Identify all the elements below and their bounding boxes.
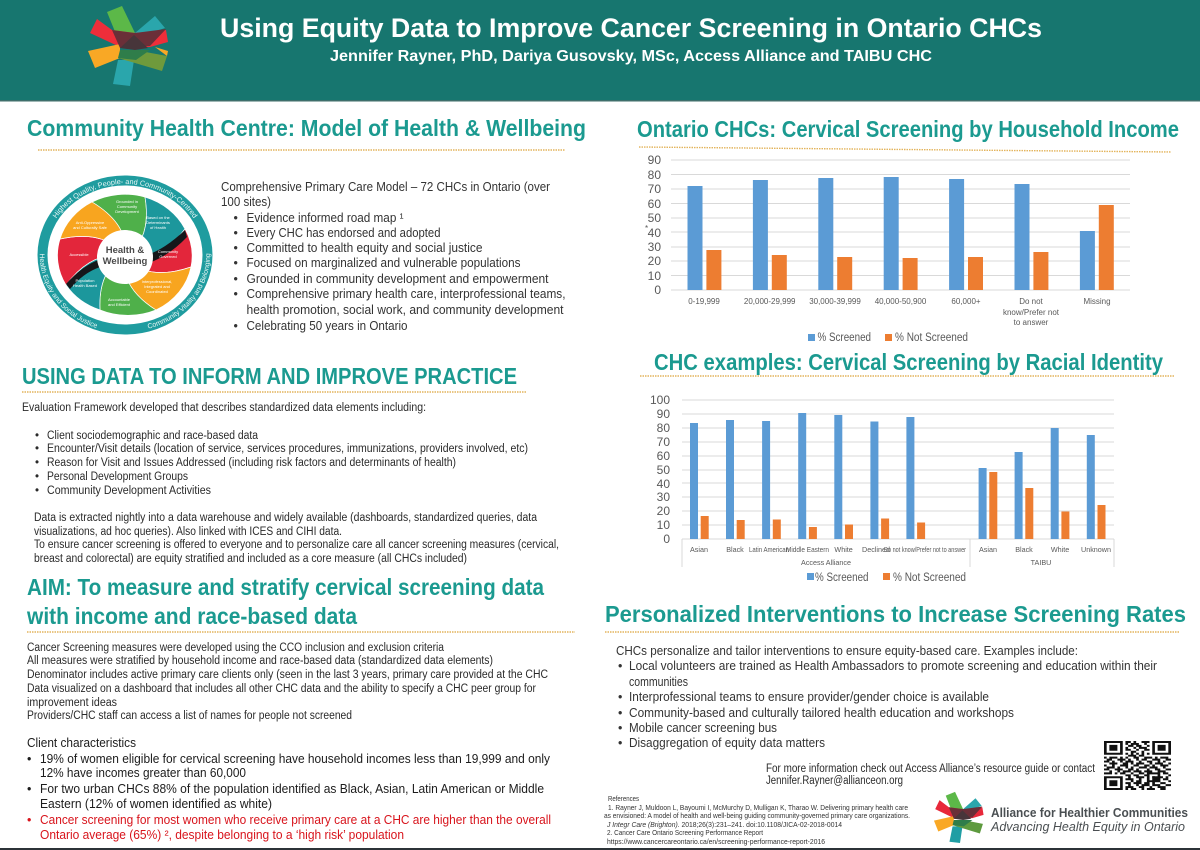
text: comprehensive primary care model: Comprehensive primary health care, interprofessional teams, <box>246 287 566 301</box>
bar chart: screening by income: 40 <box>648 226 661 240</box>
text: evaluation framework: Encounter/Visit details (location of service, services procedures, immunizations, providers involved, etc) <box>47 443 528 455</box>
bar chart: screening by racial identity: Asian <box>690 545 708 554</box>
text: client characteristics: 19% of women eligible for cervical screening have household incomes less than 19,999 and only <box>40 752 551 766</box>
text: references: 1. Rayner J, Muldoon L, Bayoumi I, McMurchy D, Mulligan K, Tharao W. Delivering primary health care <box>608 803 908 812</box>
text: references: as envisioned: A model of health and well-being guiding community-governed primary care organizations. <box>604 811 910 820</box>
text: client characteristics: Client characteristics <box>27 736 136 750</box>
title: Using Equity Data to Improve Cancer Screening in Ontario CHCs <box>220 13 1042 43</box>
diagram: health and wellbeing wheel: Accessible <box>69 252 89 257</box>
legend: income chart: % Screened <box>818 332 871 344</box>
header banner <box>0 0 1200 102</box>
authors: Jennifer Rayner, PhD, Dariya Gusovsky, MSc, Access Alliance and TAIBU CHC <box>330 48 932 65</box>
text: interventions list <box>616 644 1157 750</box>
diagram: health and wellbeing wheel: Health Based <box>73 283 97 288</box>
bar chart: screening by racial identity: Middle Eastern <box>786 545 829 554</box>
diagram: health and wellbeing wheel: Health & <box>106 245 144 256</box>
text: comprehensive primary care model: • <box>234 226 238 240</box>
text: Alliance name and tagline: Alliance for Healthier Communities <box>991 806 1188 820</box>
heading: personalized interventions: Personalized Interventions to Increase Screening Rates <box>605 601 1186 627</box>
text: evaluation framework: • <box>35 471 39 483</box>
bar chart: screening by racial identity: Black <box>726 545 744 554</box>
text: comprehensive primary care model: Every CHC has endorsed and adopted <box>246 226 441 240</box>
text: interventions list: CHCs personalize and tailor interventions to ensure equity-based care. Examples include: <box>616 644 1078 658</box>
bar chart: screening by racial identity <box>650 393 1114 584</box>
diagram: health and wellbeing wheel: Coordinated <box>146 289 168 294</box>
text: client characteristics: For two urban CHCs 88% of the population identified as Black, Asian, Latin American or Middle <box>40 782 544 796</box>
diagram: health and wellbeing wheel: Community <box>117 204 137 209</box>
text: comprehensive primary care model: Focused on marginalized and vulnerable populations <box>246 256 520 270</box>
bar chart: screening by income: 30 <box>648 240 661 254</box>
text: evaluation framework: Client sociodemographic and race-based data <box>47 430 259 442</box>
heading: aim: AIM: To measure and stratify cervical screening data <box>27 574 544 600</box>
text: comprehensive primary care model: • <box>234 287 238 301</box>
text: comprehensive primary care model: • <box>234 272 238 286</box>
bar chart: screening by racial identity: 20 <box>657 504 670 518</box>
text: references <box>604 794 910 846</box>
panel: aim <box>26 574 575 842</box>
bar chart: screening by racial identity: 80 <box>657 421 670 435</box>
text: evaluation framework: Reason for Visit and Issues Addressed (including risk factors and determinants of health) <box>47 457 456 469</box>
bar chart: screening by income: Missing <box>1083 297 1111 306</box>
text: comprehensive primary care model: • <box>234 319 238 333</box>
bar chart: screening by racial identity: White <box>834 545 853 554</box>
text: comprehensive primary care model: Comprehensive Primary Care Model – 72 CHCs in Ontario (over <box>221 180 550 194</box>
bar chart: screening by racial identity: TAIBU <box>1031 558 1051 567</box>
text: client characteristics: • <box>27 752 31 766</box>
bar chart: screening by income: 0 <box>654 283 661 297</box>
text: measures description: Data visualized on a dashboard that includes all other CHC data and the ability to specify a CHC peer group for <box>27 683 536 695</box>
text: evaluation framework: • <box>35 443 39 455</box>
text: client characteristics: Cancer screening for most women who receive primary care at a CHC are higher than the overall <box>40 813 551 827</box>
legend: racial identity chart: % Screened <box>815 572 868 584</box>
text: evaluation framework: • <box>35 457 39 469</box>
text: Alliance name and tagline: Advancing Health Equity in Ontario <box>990 820 1185 834</box>
text: interventions list: Interprofessional teams to ensure provider/gender choice is available <box>629 690 989 704</box>
bar chart: screening by racial identity: 10 <box>657 518 670 532</box>
diagram: health and wellbeing wheel: Health Equity and Social Justice <box>40 254 97 328</box>
text: interventions list: • <box>618 690 622 704</box>
text: measures description: improvement ideas <box>27 697 117 709</box>
text: comprehensive primary care model: • <box>234 241 238 255</box>
diagram: health and wellbeing wheel: Governed <box>159 254 177 259</box>
text: comprehensive primary care model: Grounded in community development and empowerment <box>246 272 549 286</box>
diagram: health and wellbeing wheel: Community <box>158 249 178 254</box>
text: comprehensive primary care model: • <box>234 211 238 225</box>
bar chart: screening by income: 40,000-50,900 <box>875 297 927 306</box>
diagram: health and wellbeing wheel: Interprofessional, <box>142 279 172 284</box>
bar chart: screening by racial identity: Black <box>1015 545 1033 554</box>
text: Alliance name and tagline <box>990 806 1188 834</box>
bar chart: screening by income: * <box>645 224 648 233</box>
text: evaluation framework: • <box>35 485 39 497</box>
bar chart: screening by income: Do not <box>1019 297 1044 306</box>
text: interventions list: Local volunteers are trained as Health Ambassadors to promote screening and education within their <box>629 659 1157 673</box>
text: comprehensive primary care model: Committed to health equity and social justice <box>246 241 483 255</box>
icon: Alliance footer logo <box>934 792 984 843</box>
text: comprehensive primary care model: • <box>234 256 238 270</box>
diagram: health and wellbeing wheel: and Culturally Safe <box>73 225 108 230</box>
text: more information <box>766 763 1096 787</box>
bar chart: screening by income: 30,000-39,999 <box>809 297 861 306</box>
diagram: health and wellbeing wheel: Population <box>76 278 94 283</box>
bar chart: screening by racial identity: White <box>1051 545 1069 554</box>
text: interventions list: Community-based and culturally tailored health education and workshops <box>629 706 1014 720</box>
legend: income chart <box>808 332 968 344</box>
heading: community health centre: Community Health Centre: Model of Health & Wellbeing <box>27 115 586 141</box>
bar chart: screening by income <box>645 153 1130 344</box>
text: evaluation framework: Community Development Activities <box>47 485 211 497</box>
text: references: References <box>608 794 639 803</box>
text: interventions list: • <box>618 736 622 750</box>
panel: personalized interventions <box>604 601 1188 846</box>
icon: Alliance pinwheel logo <box>88 6 168 86</box>
text: more information: Jennifer.Rayner@allianceon.org <box>766 775 903 787</box>
text: client characteristics: 12% have incomes greater than 60,000 <box>40 766 246 780</box>
bar chart: screening by income: know/Prefer not <box>1003 308 1060 317</box>
text: references: J Integr Care (Brighton). 2018;26(3):231–241. doi:10.1108/JICA-02-2018-0014 <box>606 820 842 829</box>
text: evaluation framework: To ensure cancer screening is offered to everyone and to personalize care all cancer screening measures (cervical, <box>34 539 559 551</box>
legend: racial identity chart <box>807 572 966 584</box>
diagram: health and wellbeing wheel: Wellbeing <box>103 256 148 267</box>
bar chart: screening by income: 20,000-29,999 <box>744 297 796 306</box>
text: comprehensive primary care model: Celebrating 50 years in Ontario <box>246 319 408 333</box>
heading: aim <box>26 574 544 629</box>
bar chart: screening by racial identity: 100 <box>650 393 670 407</box>
bar chart: screening by racial identity: 60 <box>657 449 670 463</box>
bar chart: screening by racial identity: Latin American <box>749 545 789 554</box>
text: evaluation framework: breast and colorectal) are equity stratified and included as a core measure (all CHCs included) <box>34 553 467 565</box>
bar chart: screening by income: 70 <box>648 182 661 196</box>
bar chart: screening by racial identity: 30 <box>657 490 670 504</box>
text: comprehensive primary care model <box>221 180 566 333</box>
diagram: health and wellbeing wheel: Community Vitality and Belonging <box>148 254 212 328</box>
diagram: health and wellbeing wheel: Integrated and <box>144 284 170 289</box>
text: evaluation framework: Data is extracted nightly into a data warehouse and widely available (dashboards, standardized queries, data <box>34 512 538 524</box>
text: interventions list: • <box>618 706 622 720</box>
bar chart: screening by income: 80 <box>648 168 661 182</box>
heading: using data: USING DATA TO INFORM AND IMPROVE PRACTICE <box>22 363 517 389</box>
text: measures description: Providers/CHC staff can access a list of names for people not screened <box>27 710 352 722</box>
bar chart: screening by racial identity: Do not know/Prefer not to answer <box>884 545 966 554</box>
text: evaluation framework: • <box>35 430 39 442</box>
bar chart: screening by income: 20 <box>648 254 661 268</box>
text: measures description <box>27 642 548 722</box>
text: client characteristics <box>27 736 551 842</box>
diagram: health and wellbeing wheel: Development <box>115 209 140 214</box>
bar chart: screening by income: to answer <box>1014 318 1049 327</box>
text: interventions list: Disaggregation of equity data matters <box>629 736 825 750</box>
diagram: health and wellbeing wheel <box>38 176 212 334</box>
bar chart: screening by racial identity: Unknown <box>1081 545 1111 554</box>
bar chart: screening by racial identity: 50 <box>657 463 670 477</box>
bar chart: screening by racial identity: Asian <box>979 545 997 554</box>
text: comprehensive primary care model: Evidence informed road map ¹ <box>246 211 404 225</box>
panel: community health centre model <box>27 115 586 334</box>
bar chart: screening by income: 90 <box>648 153 661 167</box>
bar chart: screening by income: 50 <box>648 211 661 225</box>
bar chart: screening by income: 0-19,999 <box>688 297 720 306</box>
diagram: health and wellbeing wheel: and Efficient <box>108 302 131 307</box>
text: comprehensive primary care model: health promotion, social work, and community development <box>246 303 564 317</box>
diagram: health and wellbeing wheel: Determinants <box>146 220 170 225</box>
text: client characteristics: • <box>27 782 31 796</box>
text: references: https://www.cancercareontario.ca/en/screening-performance-report-2016 <box>607 837 825 846</box>
text: comprehensive primary care model: 100 sites) <box>221 195 271 209</box>
text: interventions list: • <box>618 659 622 673</box>
text: evaluation framework: Evaluation Framework developed that describes standardized data elements including: <box>22 402 426 414</box>
bar chart: screening by income: 60 <box>648 197 661 211</box>
bar chart: screening by racial identity: Declined <box>862 545 890 554</box>
text: evaluation framework <box>22 402 559 565</box>
text: client characteristics: • <box>27 813 31 827</box>
bar chart: screening by racial identity: Access Alliance <box>801 558 851 567</box>
text: client characteristics: Ontario average (65%) ², despite belonging to a ‘high risk’ population <box>40 828 404 842</box>
panel: cervical screening by racial identity <box>640 349 1175 584</box>
diagram: health and wellbeing wheel: Highest Quality, People- and Community-Centred <box>52 179 198 218</box>
bar chart: screening by income: 60,000+ <box>951 297 981 306</box>
bar chart: screening by racial identity: 90 <box>657 407 670 421</box>
text: more information: For more information check out Access Alliance’s resource guide or contact <box>766 763 1096 775</box>
heading: aim: with income and race-based data <box>26 603 357 629</box>
text: interventions list: communities <box>629 675 688 689</box>
legend: income chart: % Not Screened <box>895 332 968 344</box>
text: measures description: Cancer Screening measures were developed using the CCO inclusion and exclusion criteria <box>27 642 445 654</box>
diagram: health and wellbeing wheel: of Health <box>150 225 166 230</box>
diagram: health and wellbeing wheel: Grounded in <box>116 199 138 204</box>
text: measures description: Denominator includes active primary care clients only (seen in the last 3 years, primary care provided at the CHC <box>27 669 548 681</box>
text: client characteristics: Eastern (12% of women identified as white) <box>40 797 272 811</box>
text: evaluation framework: visualizations, ad hoc queries). Also linked with ICES and CIHI data. <box>34 526 342 538</box>
diagram: health and wellbeing wheel: Based on the <box>146 215 171 220</box>
panel: using data to inform practice <box>22 363 559 565</box>
text: references: 2. Cancer Care Ontario Screening Performance Report <box>607 828 763 837</box>
text: measures description: All measures were stratified by household income and race-based data (standardized data elements) <box>27 655 493 667</box>
icon: QR code <box>1104 741 1171 790</box>
panel: cervical screening by household income <box>637 116 1179 344</box>
bar chart: screening by racial identity: 70 <box>657 435 670 449</box>
bar chart: screening by racial identity: 40 <box>657 477 670 491</box>
diagram: health and wellbeing wheel: Accountable <box>108 297 131 302</box>
text: interventions list: Mobile cancer screening bus <box>629 721 777 735</box>
legend: racial identity chart: % Not Screened <box>893 572 966 584</box>
text: interventions list: • <box>618 721 622 735</box>
text: evaluation framework: Personal Development Groups <box>47 471 188 483</box>
bar chart: screening by racial identity: 0 <box>663 532 670 546</box>
bar chart: screening by income: 10 <box>648 269 661 283</box>
diagram: health and wellbeing wheel: Anti-Oppressive <box>76 220 105 225</box>
